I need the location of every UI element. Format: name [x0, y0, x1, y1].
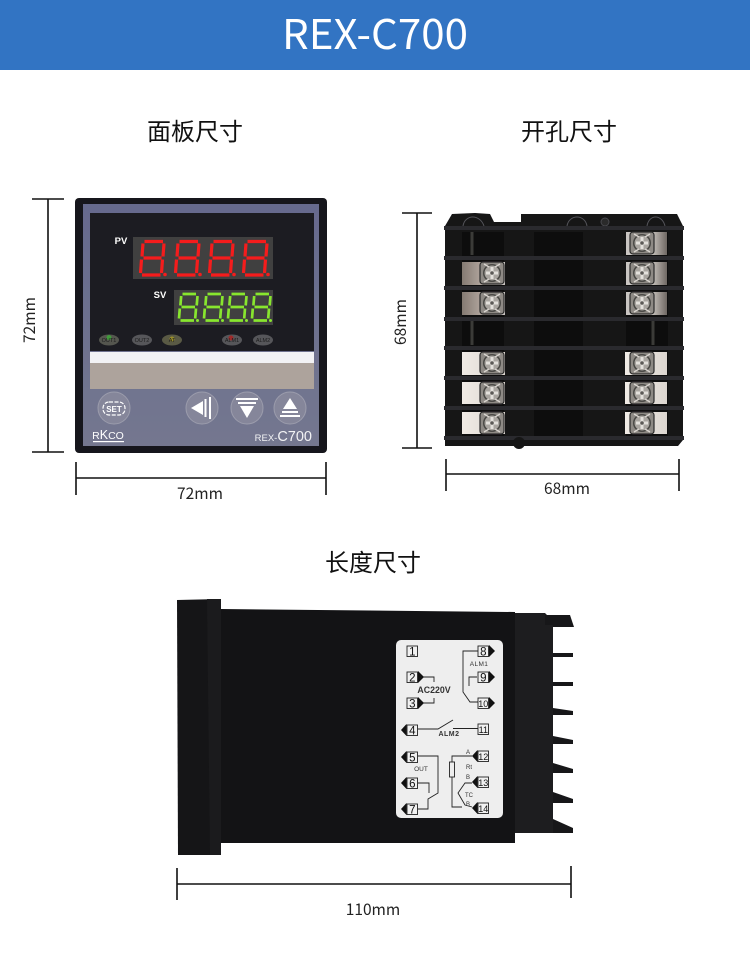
terminal boxes left: 2 [409, 672, 416, 684]
display area [90, 213, 314, 351]
label captions: OUT [414, 766, 428, 773]
header banner [0, 0, 750, 70]
heading: panel size: 面板尺寸 [147, 112, 243, 147]
label 68mm vertical: 68mm [389, 299, 411, 345]
inner posts [472, 232, 653, 345]
terminal boxes left: 7 [409, 804, 416, 816]
dimension: length [177, 866, 571, 920]
front flange [177, 599, 220, 855]
title: REX-C700 [282, 1, 468, 61]
label captions: TC [465, 793, 474, 799]
bottom mounting notch [513, 437, 525, 449]
SV green display [174, 290, 273, 325]
terminal boxes left: 4 [409, 726, 416, 738]
label 68mm horizontal: 68mm [544, 477, 590, 499]
dimension: cutout width [446, 459, 679, 499]
label captions: Rt [466, 765, 472, 771]
wiring label [396, 640, 503, 818]
panel: side view [177, 599, 574, 855]
heading: cutout size: 开孔尺寸 [521, 112, 617, 147]
label captions [414, 661, 488, 808]
label 110mm: 110mm [346, 898, 400, 920]
down button [231, 392, 263, 424]
panel: rear terminals [444, 213, 684, 449]
housing body [221, 609, 515, 843]
indicator lamps: ALM1 [225, 338, 239, 344]
dimension: panel width [76, 462, 326, 504]
mounting hole [601, 218, 609, 226]
label captions: AC220V [417, 685, 451, 695]
SET button [98, 392, 130, 424]
PV label: PV [115, 236, 128, 247]
indicator lamps: OUT2 [135, 338, 149, 344]
wiring lines [418, 651, 478, 809]
terminal boxes right: 13 [478, 778, 488, 788]
SV label: SV [154, 290, 167, 301]
dimension: panel height [18, 199, 64, 452]
indicator lamps: ALM2 [256, 338, 270, 344]
terminal boxes right: 12 [478, 752, 488, 762]
dimension: cutout height [389, 213, 432, 448]
terminal boxes right: 14 [478, 804, 488, 814]
terminal boxes left: 5 [409, 752, 416, 764]
indicator lamps: AT [169, 338, 176, 344]
terminal fins [545, 615, 574, 833]
terminal boxes left [401, 646, 424, 816]
label captions: ALM1 [470, 661, 488, 668]
terminal boxes right [472, 645, 495, 814]
label captions: A [466, 750, 470, 756]
indicator lamps: OUT1 [102, 338, 116, 344]
terminal boxes left: 6 [409, 778, 416, 790]
terminal boxes right: 10 [478, 699, 488, 709]
SET button: SET [106, 405, 122, 414]
screws [480, 232, 654, 434]
label 72mm vertical: 72mm [18, 297, 40, 343]
up button [274, 392, 306, 424]
model label: REX-C700 [255, 429, 312, 445]
label 72mm horizontal: 72mm [177, 482, 223, 504]
label captions: B [466, 802, 470, 808]
indicator lamps [99, 334, 273, 346]
panel: front controller [75, 198, 327, 453]
metal plates [462, 232, 667, 434]
terminal boxes right: 9 [480, 672, 487, 684]
top clips [463, 217, 665, 226]
terminal boxes right: 8 [480, 646, 487, 658]
RKCO logo: RKCO [92, 428, 124, 442]
rear section [515, 613, 553, 833]
terminal boxes left: 3 [409, 698, 416, 710]
shift button [186, 392, 218, 424]
tan label strip [90, 363, 314, 389]
label captions: B [466, 775, 470, 781]
terminal boxes right: 11 [479, 725, 488, 735]
terminal boxes left: 1 [409, 646, 416, 658]
horizontal ribs [444, 226, 684, 440]
PV red display [133, 237, 273, 279]
heading: length size: 长度尺寸 [325, 543, 421, 578]
label captions: ALM2 [438, 731, 460, 738]
white strip [90, 352, 314, 363]
